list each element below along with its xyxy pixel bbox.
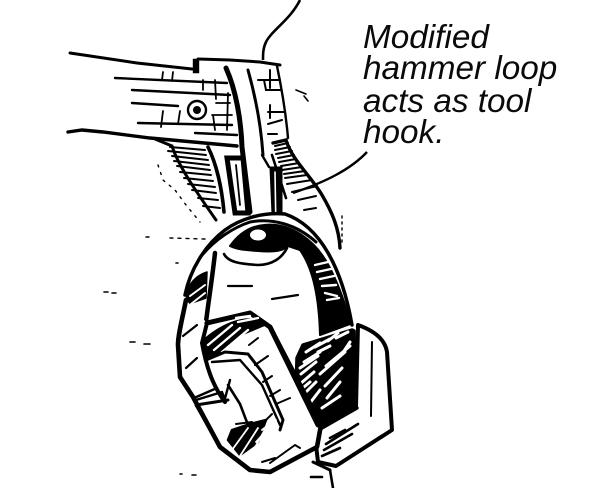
illustration: headphone headband — [185, 214, 352, 335]
scattered specks — [104, 90, 308, 475]
illustration: left hatched pouch — [146, 139, 224, 239]
callout text: acts as tool — [363, 83, 533, 120]
hanging wire — [263, 0, 300, 60]
callout text: hook. — [363, 114, 444, 151]
illustration: right ear cup — [296, 325, 392, 488]
callout text — [363, 19, 557, 151]
illustration: lower strap with hatching — [272, 140, 342, 248]
leader line from callout to hook — [293, 152, 367, 193]
illustration: tool belt — [68, 53, 237, 146]
callout text: Modified — [363, 19, 490, 56]
illustration: hammer loop strap — [198, 59, 288, 212]
illustration: metal clips — [227, 158, 281, 232]
illustration: left ear cup — [178, 300, 321, 472]
callout text: hammer loop — [363, 50, 557, 87]
icon: rivet — [188, 101, 206, 119]
